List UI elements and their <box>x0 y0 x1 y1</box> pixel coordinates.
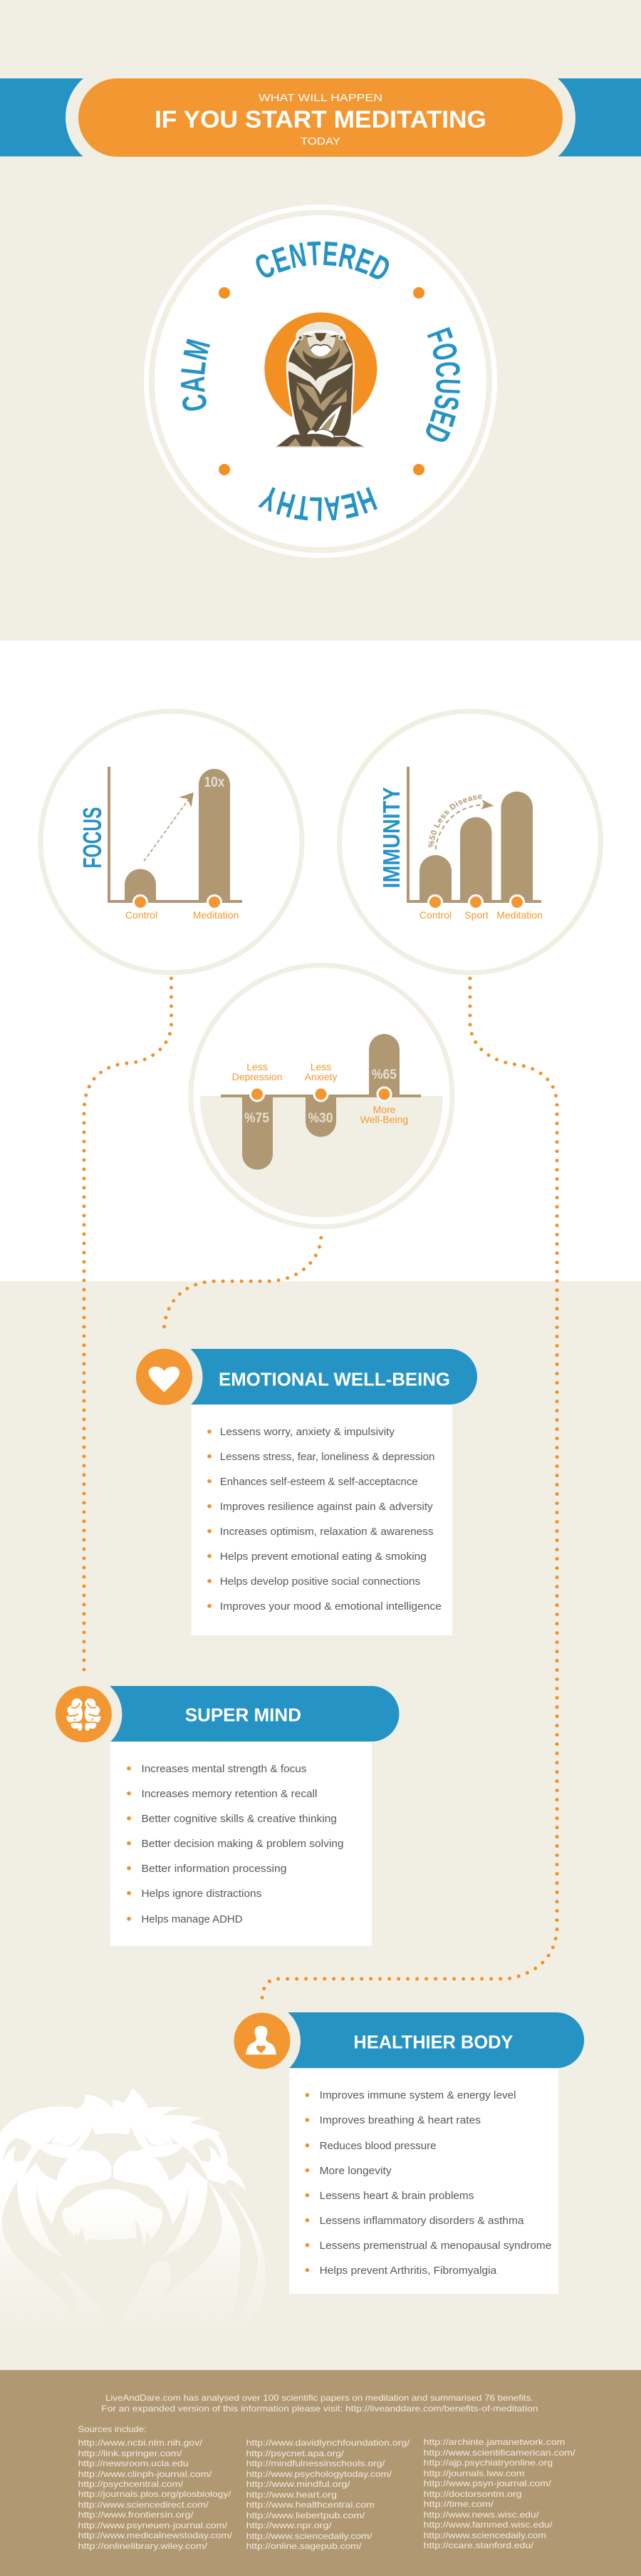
title line 3: TODAY <box>301 136 340 148</box>
focus axes <box>109 767 242 901</box>
header bar <box>106 1686 399 1742</box>
title banner <box>0 66 641 170</box>
dotted connector: immunity to healthier body <box>262 978 557 2000</box>
sources column 2: http://www.sciencedaily.com/ <box>246 2531 372 2541</box>
meditation bar <box>501 792 533 901</box>
focus markers <box>132 894 222 910</box>
half disc <box>200 1096 443 1217</box>
sources column 1: http://www.psyneuen-journal.com/ <box>78 2520 228 2530</box>
control bar <box>125 869 156 901</box>
sources column 1: http://link.springer.com/ <box>78 2448 182 2458</box>
bullet list: Increases mental strength & focus <box>141 1763 306 1775</box>
chart: focus <box>41 711 302 973</box>
immunity curved arrow <box>436 800 494 849</box>
control bar <box>419 855 452 901</box>
icon: brain <box>56 1686 112 1742</box>
bullet list: Reduces blood pressure <box>320 2140 437 2152</box>
list card <box>289 2068 558 2294</box>
bullet list: Lessens heart & brain problems <box>320 2190 474 2202</box>
markers <box>249 1086 392 1102</box>
sources column 2: http://mindfulnessinschools.org/ <box>246 2458 385 2468</box>
immunity axes <box>408 767 541 901</box>
label less depression: Depression <box>232 1071 282 1082</box>
sources column 3: http://journals.lww.com <box>424 2468 524 2478</box>
intro text: LiveAndDare.com has analysed over 100 scientific papers on meditation and summarised 76 benefits. <box>105 2393 533 2403</box>
title line 1: WHAT WILL HAPPEN <box>259 93 382 104</box>
sources column 3 <box>424 2437 575 2550</box>
label control: Control <box>125 909 157 921</box>
sources column 1: http://www.sciencedirect.com/ <box>78 2500 209 2510</box>
bullet list <box>306 2089 551 2277</box>
curved label: %50 Less Disease <box>428 795 482 848</box>
label control: Control <box>419 909 452 921</box>
sources column 2: http://www.davidlynchfoundation.org/ <box>246 2438 410 2448</box>
meditation bar <box>199 769 230 901</box>
bullet list: Helps ignore distractions <box>141 1888 261 1900</box>
word: centered: CENTERED <box>256 241 389 279</box>
heading: HEALTHIER BODY <box>353 2031 513 2052</box>
chart: immunity <box>337 708 603 975</box>
word: focused: FOCUSED <box>426 326 460 442</box>
sources column 1: http://newsroom.ucla.edu <box>78 2458 189 2468</box>
bullet list: Improves resilience against pain & adversity <box>220 1501 433 1513</box>
sources column 2: http://www.liebertpub.com/ <box>246 2510 365 2520</box>
sources column 3: http://time.com/ <box>424 2499 494 2509</box>
icon: heart <box>136 1349 192 1405</box>
sources column 3: http://www.sciencedaily.com <box>424 2530 546 2540</box>
bar 30 <box>306 1096 336 1137</box>
sources column 2 <box>246 2438 410 2551</box>
value 10x: 10x <box>204 775 225 790</box>
sources column 1: http://journals.plos.org/plosbiology/ <box>78 2489 231 2499</box>
heading: EMOTIONAL WELL-BEING <box>219 1368 450 1390</box>
label meditation: Meditation <box>496 909 543 921</box>
bullet list: Improves breathing & heart rates <box>320 2114 481 2126</box>
sources column 1: http://www.ncbi.nlm.nih.gov/ <box>78 2438 203 2448</box>
main title: IF YOU START MEDITATING <box>155 106 486 133</box>
label less depression: Less <box>246 1061 268 1072</box>
value 30: %30 <box>308 1111 333 1126</box>
bullet list: Lessens premenstrual & menopausal syndrome <box>320 2240 551 2252</box>
bullet list: More longevity <box>320 2165 392 2177</box>
sources column 3: http://archinte.jamanetwork.com <box>424 2437 565 2447</box>
bullet list: Increases optimism, relaxation & awareness <box>220 1526 433 1538</box>
bullet list: Helps prevent emotional eating & smoking <box>220 1551 427 1563</box>
bullet list: Helps prevent Arthritis, Fibromyalgia <box>320 2265 497 2277</box>
sources column 2: http://www.healthcentral.com <box>246 2500 375 2510</box>
sources column 1: http://www.frontiersin.org/ <box>78 2510 194 2520</box>
hero circle <box>144 205 497 558</box>
orange dots <box>219 287 424 475</box>
list card <box>191 1404 452 1635</box>
sources column 2: http://www.psychologytoday.com/ <box>246 2469 392 2479</box>
sources column 3: http://ajp.psychiatryonline.org <box>424 2458 553 2468</box>
intro text <box>101 2393 538 2414</box>
word: healthy: HEALTHY <box>258 487 377 522</box>
sources column 2: http://psycnet.apa.org/ <box>246 2448 345 2458</box>
sources column 2: http://www.mindful.org/ <box>246 2479 350 2489</box>
sources column 1: http://www.clinph-journal.com/ <box>78 2469 212 2479</box>
label less anxiety: Anxiety <box>305 1071 337 1082</box>
bullet list: Better decision making & problem solving <box>141 1838 344 1850</box>
sources column 3: http://www.scientificamerican.com/ <box>424 2448 575 2458</box>
dotted connector: focus to super mind <box>84 978 171 1672</box>
lion illustration <box>264 312 377 447</box>
bar 65 <box>369 1034 400 1096</box>
sources column 3: http://doctorsontm.org <box>424 2489 521 2499</box>
sources column 1: http://psychcentral.com/ <box>78 2479 184 2489</box>
bullet list: Helps develop positive social connections <box>220 1576 420 1588</box>
lion watermark <box>0 2089 266 2331</box>
label more well-being: More <box>373 1104 395 1115</box>
bullet list <box>207 1426 442 1613</box>
sources column 2: http://www.heart.org <box>246 2490 337 2500</box>
sources column 3: http://www.fammed.wisc.edu/ <box>424 2520 553 2530</box>
bullet list: Helps manage ADHD <box>141 1913 243 1925</box>
intro text: For an expanded version of this information please visit: http://liveanddare.com/benefits-of-meditation <box>101 2404 538 2414</box>
sources column 3: http://ccare.stanford.edu/ <box>424 2540 534 2550</box>
sources column 1: http://onlinelibrary.wiley.com/ <box>78 2541 208 2551</box>
bullet list: Lessens inflammatory disorders & asthma <box>320 2215 524 2227</box>
heading: SUPER MIND <box>185 1705 301 1726</box>
panel: emotional well-being <box>125 1338 477 1635</box>
chart: emotional <box>191 965 452 1227</box>
immunity vertical title: IMMUNITY <box>378 787 405 888</box>
value 65: %65 <box>372 1067 397 1082</box>
header bar <box>187 1349 477 1405</box>
icon: person with heart <box>234 2012 291 2069</box>
sources column 2: http://online.sagepub.com/ <box>246 2541 362 2551</box>
bullet list: Lessens stress, fear, loneliness & depression <box>220 1451 434 1463</box>
bullet list: Enhances self-esteem & self-acceptacnce <box>220 1476 418 1488</box>
bullet list <box>127 1763 344 1925</box>
sources column 1: http://www.medicalnewstoday.com/ <box>78 2530 233 2540</box>
label less anxiety: Less <box>311 1061 331 1072</box>
immunity markers <box>427 894 525 910</box>
bullet list: Better information processing <box>141 1863 286 1875</box>
bullet list: Better cognitive skills & creative thinking <box>141 1813 337 1825</box>
bullet list: Increases memory retention & recall <box>141 1788 318 1800</box>
footer <box>0 2370 641 2576</box>
sources heading: Sources include: <box>78 2424 147 2434</box>
bullet list: Improves your mood & emotional intelligence <box>220 1600 442 1613</box>
sources column 1 <box>78 2438 233 2551</box>
sources column 2: http://www.npr.org/ <box>246 2520 332 2530</box>
panel: super mind <box>45 1676 400 1946</box>
bullet list: Lessens worry, anxiety & impulsivity <box>220 1426 395 1438</box>
focus rising arrow <box>144 792 194 861</box>
baseline <box>221 1095 421 1097</box>
header bar <box>284 2012 584 2068</box>
label more well-being: Well-Being <box>360 1114 408 1125</box>
sources column 3: http://www.news.wisc.edu/ <box>424 2510 539 2520</box>
value 75: %75 <box>244 1111 269 1126</box>
label meditation: Meditation <box>193 909 239 921</box>
sources column 3: http://www.psyn-journal.com/ <box>424 2478 552 2488</box>
word: calm: CALM <box>181 338 210 410</box>
label sport: Sport <box>464 909 489 921</box>
dotted connector: emotional to emotional well-being <box>164 1238 321 1334</box>
focus vertical title: FOCUS <box>78 807 107 868</box>
sport bar <box>460 817 491 901</box>
panel: healthier body <box>224 2002 584 2294</box>
list card <box>110 1742 372 1946</box>
bullet list: Improves immune system & energy level <box>320 2089 516 2101</box>
bar 75 <box>242 1096 273 1170</box>
